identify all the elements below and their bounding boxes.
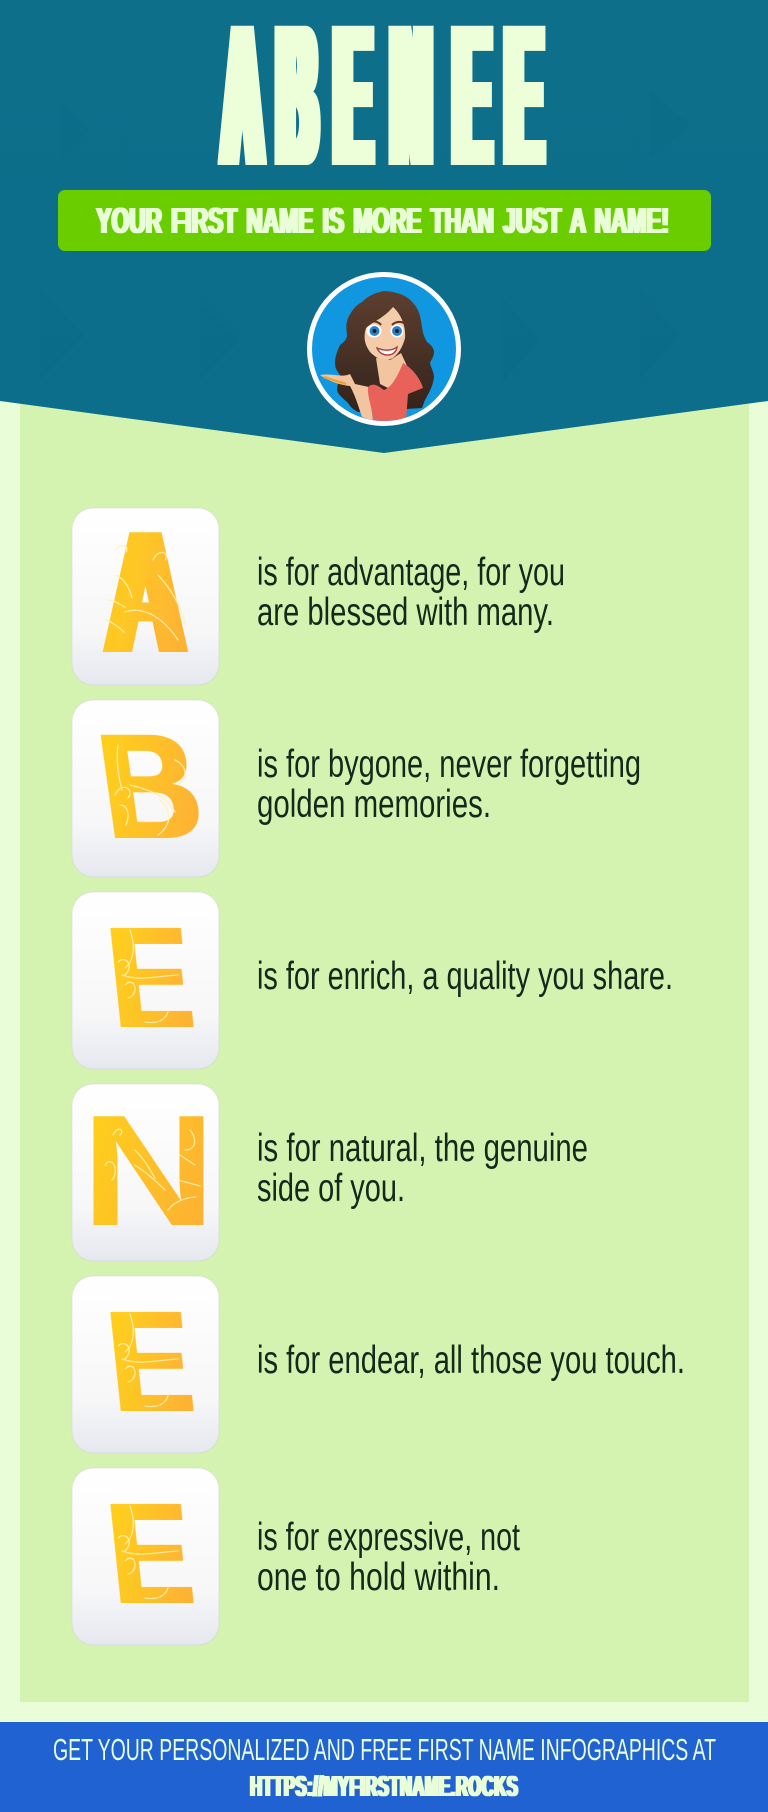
letter A: A xyxy=(107,494,184,689)
panel: header with chevron bottom xyxy=(0,0,768,453)
text: line E third: one to hold within. xyxy=(257,1556,500,1599)
text: line B: is for bygone, never forgetting xyxy=(257,743,641,786)
text: line N xyxy=(257,1127,588,1210)
text: line A xyxy=(257,551,565,634)
icon: woman avatar xyxy=(310,274,458,424)
text: line E third: is for expressive, not xyxy=(257,1516,520,1559)
tile: letter N xyxy=(72,1083,219,1261)
text: line B xyxy=(257,743,641,826)
tile: letter E third xyxy=(72,1468,219,1645)
tile: letter E second xyxy=(72,1276,219,1453)
text: line B: golden memories. xyxy=(257,783,491,826)
letter E: E xyxy=(102,897,199,1058)
tile: letter B xyxy=(72,700,219,877)
text: line E third xyxy=(257,1516,520,1599)
letter E: E xyxy=(102,1281,199,1442)
footer xyxy=(0,1722,768,1812)
text: line N: side of you. xyxy=(257,1167,405,1210)
tile: letter A xyxy=(72,494,219,689)
letter E: E xyxy=(102,1473,199,1634)
text: line N: is for natural, the genuine xyxy=(257,1127,588,1170)
footer link: HTTPS://MYFIRSTNAME.ROCKS xyxy=(250,1770,518,1802)
text: line A: is for advantage, for you xyxy=(257,551,565,594)
letter B: B xyxy=(90,703,211,870)
text: line A: are blessed with many. xyxy=(257,591,554,634)
banner text: YOUR FIRST NAME IS MORE THAN JUST A NAME! xyxy=(96,202,669,241)
banner xyxy=(58,190,711,251)
letter N: N xyxy=(81,1083,216,1259)
tile: letter E xyxy=(72,892,219,1069)
panel: content background xyxy=(20,380,749,1702)
